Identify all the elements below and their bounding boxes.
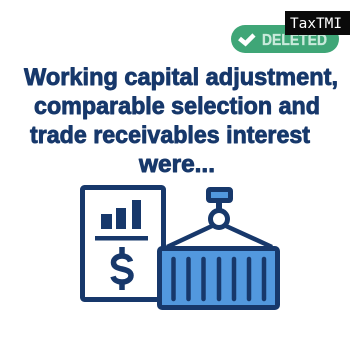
hook ring	[210, 210, 228, 228]
watermark: TaxTMI: TaxTMI	[290, 16, 342, 32]
crane hook block	[208, 190, 230, 200]
status badge: deleted: DELETED	[262, 32, 327, 49]
hook stem	[216, 203, 222, 210]
icon: shipping container on hook	[160, 190, 278, 308]
title: comparable selection and	[34, 93, 320, 120]
title: were...	[138, 151, 215, 178]
title: Working capital adjustment,	[24, 64, 338, 91]
lifting cables	[167, 226, 272, 247]
bar chart	[101, 200, 141, 229]
title: trade receivables interest	[30, 122, 310, 149]
title	[24, 64, 338, 178]
container body	[160, 248, 278, 308]
divider line	[95, 236, 148, 240]
icon: financial document	[82, 188, 164, 300]
container ribs	[174, 259, 264, 299]
dollar sign	[113, 247, 131, 290]
status badge: deleted	[231, 25, 339, 53]
watermark: TaxTMI	[285, 11, 350, 35]
